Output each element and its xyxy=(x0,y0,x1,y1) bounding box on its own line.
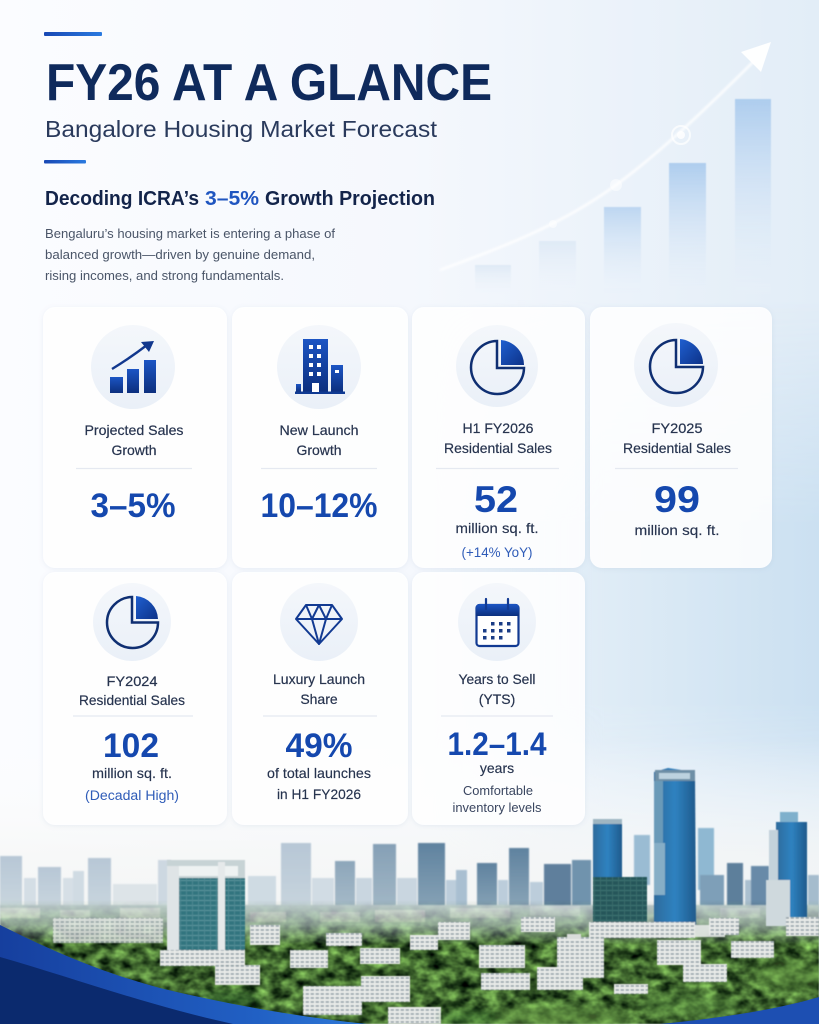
city skyline photo xyxy=(0,768,819,1024)
label xyxy=(444,420,552,456)
note: (+14% YoY) xyxy=(462,545,532,560)
foliage ground xyxy=(0,900,819,1024)
label: New Launch xyxy=(280,422,358,438)
value: 102 xyxy=(103,727,159,765)
label: Growth xyxy=(296,442,342,458)
panel: FY2024 residential sales xyxy=(43,572,227,825)
detail xyxy=(452,784,542,815)
panel: luxury launch share xyxy=(232,572,408,825)
panel: H1 FY2026 residential sales xyxy=(412,307,585,568)
detail: in H1 FY2026 xyxy=(277,786,361,802)
detail: of total launches xyxy=(267,765,371,781)
background growth arrow xyxy=(440,42,771,270)
intro paragraph xyxy=(45,226,335,283)
pale ground and distant low-rise xyxy=(0,905,819,945)
unit: million sq. ft. xyxy=(634,522,720,538)
background sky xyxy=(477,0,819,836)
subtitle: Bangalore Housing Market Forecast xyxy=(45,116,437,142)
label: Residential Sales xyxy=(79,692,185,708)
label: Luxury Launch xyxy=(273,671,365,687)
unit: million sq. ft. xyxy=(456,520,538,536)
intro paragraph: Bengaluru’s housing market is entering a phase of xyxy=(45,226,335,241)
label xyxy=(280,422,358,458)
value: 10–12% xyxy=(260,487,378,525)
label: Growth xyxy=(111,442,157,458)
label xyxy=(84,422,184,458)
panel: years to sell xyxy=(412,572,585,825)
section heading: Decoding ICRA’s xyxy=(45,188,199,210)
icon: pie chart xyxy=(93,583,171,661)
label: Residential Sales xyxy=(444,440,552,456)
label: H1 FY2026 xyxy=(462,420,534,436)
sunlit tree canopy xyxy=(200,959,819,1024)
icon: pie chart xyxy=(634,323,718,407)
value: 3–5% xyxy=(90,487,176,525)
section heading: Growth Projection xyxy=(265,188,435,210)
intro paragraph: balanced growth—driven by genuine demand, xyxy=(45,247,315,262)
section heading: 3–5% xyxy=(205,188,259,210)
detail xyxy=(267,765,371,802)
label: FY2024 xyxy=(106,673,158,689)
top accent bar xyxy=(44,32,102,36)
label: (YTS) xyxy=(479,691,515,707)
panel: FY2025 residential sales xyxy=(590,307,772,568)
value: 49% xyxy=(286,727,352,765)
background rising bar chart xyxy=(475,99,771,294)
label xyxy=(273,671,365,707)
distant towers xyxy=(0,828,819,928)
detail: inventory levels xyxy=(452,801,542,815)
icon: rising bar chart xyxy=(91,325,175,409)
value: 1.2–1.4 xyxy=(448,726,547,762)
value: 52 xyxy=(474,479,518,520)
title: FY26 AT A GLANCE xyxy=(46,54,492,112)
icon: diamond xyxy=(280,583,358,661)
detail: Comfortable xyxy=(463,784,533,798)
label: Share xyxy=(300,691,338,707)
panel: projected sales growth xyxy=(43,307,227,568)
note: (Decadal High) xyxy=(85,788,179,803)
second accent bar xyxy=(44,160,86,164)
unit: million sq. ft. xyxy=(92,765,172,781)
label xyxy=(623,420,731,456)
icon: calendar xyxy=(458,583,536,661)
bottom left blue swoosh xyxy=(0,925,367,1024)
icon: office building xyxy=(277,325,361,409)
label: FY2025 xyxy=(652,420,703,436)
panel: new launch growth xyxy=(232,307,408,568)
label: Years to Sell xyxy=(458,671,536,687)
bottom right blue swoosh xyxy=(660,997,819,1024)
label: Residential Sales xyxy=(623,440,731,456)
label xyxy=(79,673,185,708)
section heading xyxy=(45,188,435,210)
label xyxy=(458,671,536,707)
intro paragraph: rising incomes, and strong fundamentals. xyxy=(45,268,284,283)
horizon haze xyxy=(0,740,819,930)
unit: years xyxy=(480,760,514,776)
label: Projected Sales xyxy=(84,422,184,438)
low-rise white buildings xyxy=(53,917,819,1024)
tall glass towers xyxy=(160,768,807,966)
icon: pie chart xyxy=(456,325,538,407)
value: 99 xyxy=(654,479,700,520)
